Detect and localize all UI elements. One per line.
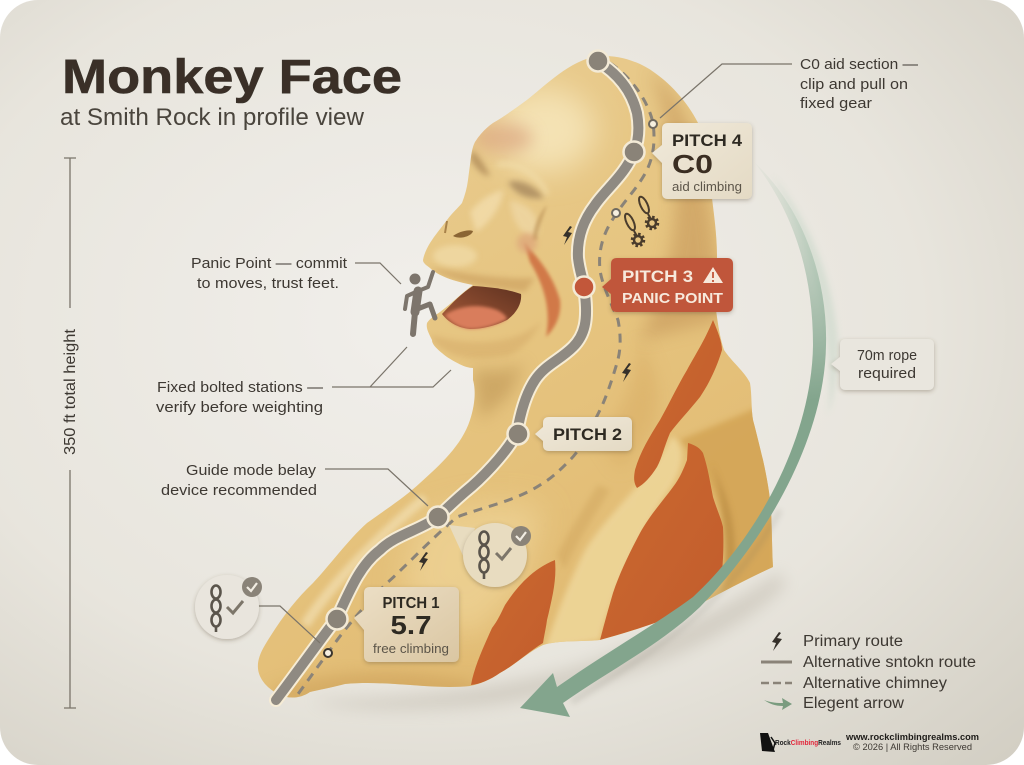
open mouth <box>442 286 521 329</box>
callout: 70m rope required: 70m rope <box>857 347 917 364</box>
icon: aid gear carabiners <box>623 195 658 246</box>
label: Pitch 3 panic point: PITCH 3 <box>622 268 693 286</box>
legend: Alternative sntokn route <box>803 654 976 671</box>
footer website and copyright: © 2026 | All Rights Reserved <box>853 742 972 752</box>
height scale <box>62 158 79 708</box>
label: Pitch 2: PITCH 2 <box>553 426 622 444</box>
callout: Panic Point: Panic Point — commit <box>191 255 348 272</box>
callout: guide mode belay: device recommended <box>161 482 317 499</box>
small anchor markers <box>324 120 657 657</box>
callout: fixed bolted stations: verify before weighting <box>156 399 323 416</box>
footer website and copyright: www.rockclimbingrealms.com <box>845 732 979 743</box>
callout: Panic Point: to moves, trust feet. <box>197 275 339 292</box>
label: Pitch 1: free climbing <box>373 641 449 656</box>
callout: Panic Point <box>191 255 401 292</box>
rock shading facets <box>270 70 775 706</box>
title: Monkey Face <box>62 51 402 104</box>
legend: Alternative chimney <box>803 675 947 692</box>
callout: C0 aid section: C0 aid section — <box>800 56 918 73</box>
footer logo <box>760 733 841 752</box>
icon: climber <box>405 272 435 334</box>
rock ground shadow <box>310 572 785 709</box>
callout: 70m rope required <box>831 339 934 390</box>
callout: C0 aid section: clip and pull on <box>800 76 908 93</box>
red rock patches <box>471 320 723 685</box>
callout: C0 aid section <box>660 56 918 118</box>
label: Pitch 4: C0 <box>672 149 713 179</box>
footer logo: RockClimbingRealms <box>775 740 841 747</box>
footer website and copyright <box>845 732 979 752</box>
label: Pitch 1 <box>354 587 459 662</box>
callout: 70m rope required: required <box>858 365 916 382</box>
icon: chain check badge left <box>195 575 320 643</box>
subtitle: at Smith Rock in profile view <box>60 104 365 131</box>
callout: fixed bolted stations: Fixed bolted stations — <box>157 379 323 396</box>
alternative chimney dashed route <box>295 63 654 698</box>
label: Pitch 4 <box>652 123 752 199</box>
label: Pitch 1: 5.7 <box>390 610 432 640</box>
callout: fixed bolted stations <box>156 347 451 416</box>
icon: chain check badge center <box>449 523 531 587</box>
height scale: 350 ft total height <box>62 328 79 455</box>
callout: guide mode belay <box>161 462 428 506</box>
callout: guide mode belay: Guide mode belay <box>186 462 317 479</box>
rock formation: monkey face <box>258 56 775 706</box>
label: Pitch 4: PITCH 4 <box>672 132 743 150</box>
label: Pitch 3 panic point: PANIC POINT <box>622 290 723 307</box>
label: Pitch 2 <box>535 417 632 451</box>
face details <box>430 123 560 420</box>
elegant green arrow <box>520 163 838 717</box>
legend <box>761 632 976 712</box>
primary route line <box>276 61 638 700</box>
legend: Primary route <box>803 633 903 650</box>
callout: C0 aid section: fixed gear <box>800 95 872 112</box>
label: Pitch 4: aid climbing <box>672 179 742 194</box>
label: Pitch 1: PITCH 1 <box>382 595 440 612</box>
lightning bolt icons on the rock <box>419 226 631 571</box>
legend: Elegent arrow <box>803 695 905 712</box>
label: Pitch 3 panic point <box>602 258 733 312</box>
route waypoint nodes <box>326 50 644 630</box>
